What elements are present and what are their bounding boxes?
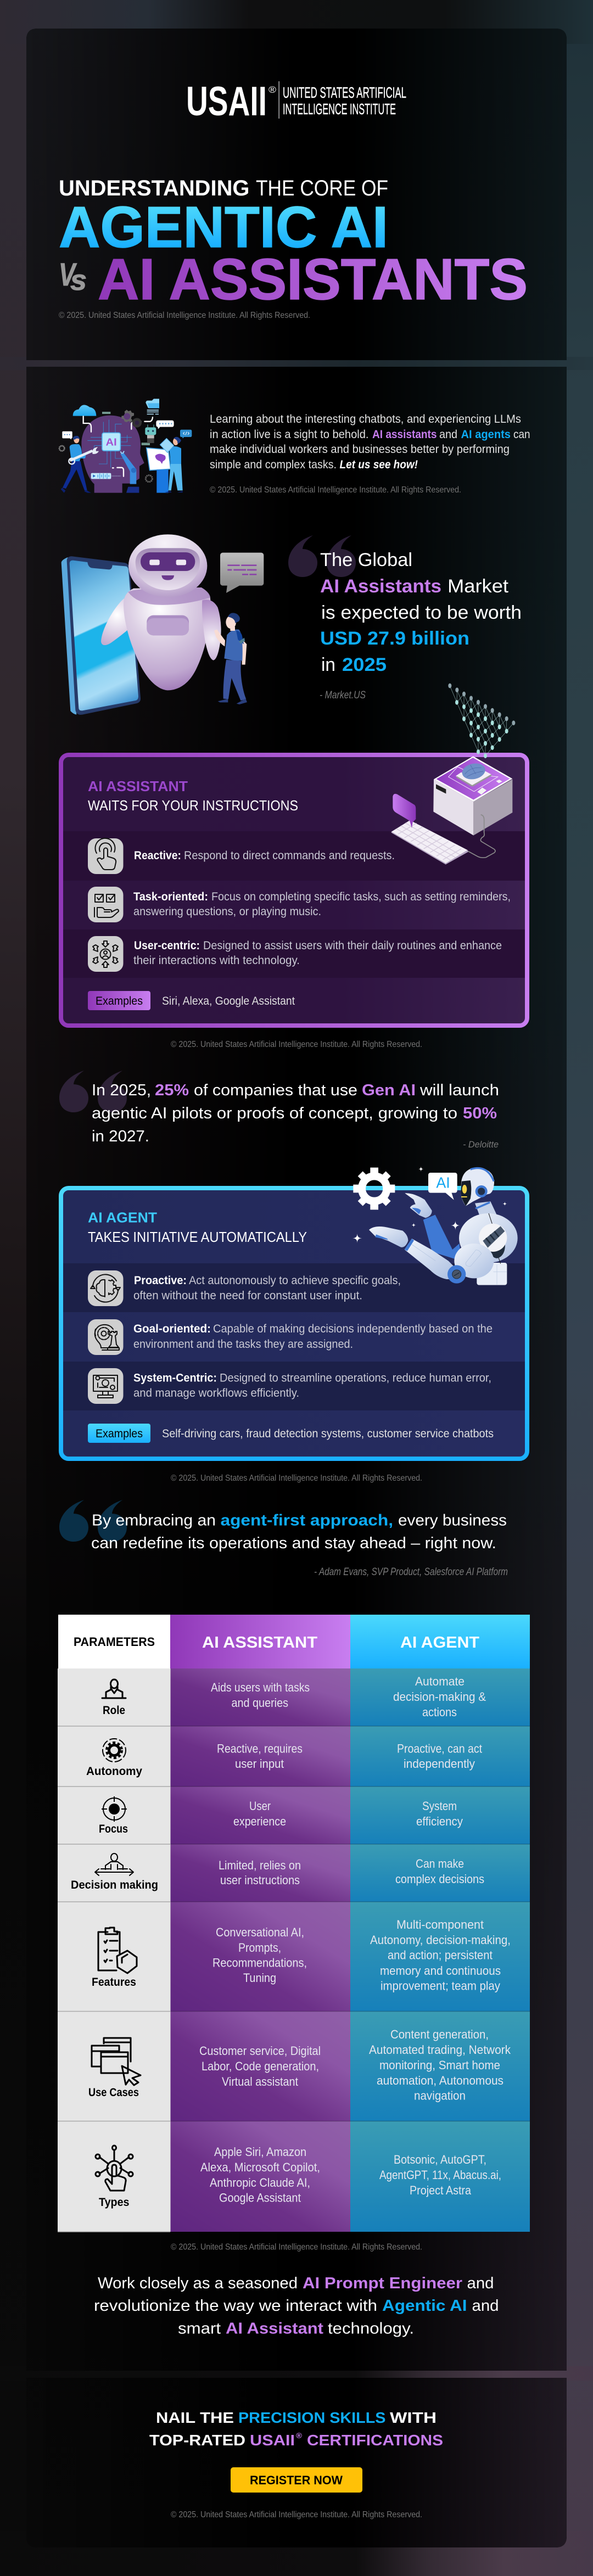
row: focus: User [249,1799,271,1813]
row: use cases: automation, Autonomous [377,2074,504,2087]
illustration: AI head and engineers [59,399,192,493]
row: role: actions [422,1705,457,1719]
icon: autonomy [103,1739,126,1762]
CTA heading: WITH [390,2409,437,2426]
row: role: Automate [415,1675,465,1688]
icon: types [96,2146,133,2191]
intro paragraph [210,412,530,471]
row: user centric: their interactions with technology. [133,954,300,967]
quote: Deloitte: in 2027. [92,1128,149,1145]
person [214,613,247,704]
CTA heading: CERTIFICATIONS [307,2432,443,2449]
quote: Deloitte: will launch [419,1082,499,1099]
heading: AI AGENT [88,1210,157,1225]
row: goal oriented: environment and the tasks they are assigned. [133,1337,353,1351]
USAII logo: UNITED STATES ARTIFICIAL [283,84,406,101]
row: decision making: Decision making [71,1879,158,1891]
quote: Deloitte: In 2025, [92,1082,151,1099]
title: UNDERSTANDING [59,176,249,200]
row: features [58,1902,530,2012]
intro paragraph: simple and complex tasks. [210,458,337,471]
row: focus [58,1787,530,1844]
row: goal oriented: Goal-oriented: [133,1322,211,1335]
row: user centric [88,936,502,972]
quote: Deloitte: agentic AI pilots or proofs of concept, growing to [92,1105,457,1122]
row: role [58,1668,530,1726]
icon: monitor workflow [88,1368,123,1404]
closing statement: revolutionize the way we interact with [94,2297,377,2315]
gear [353,1168,395,1209]
quote: Deloitte: - Deloitte [463,1139,499,1150]
intro paragraph: Let us see how! [339,458,418,471]
icon: features [98,1928,137,1973]
quote: Adam Evans: every business [398,1512,507,1530]
row: reactive: Respond to direct commands and requests. [184,849,395,862]
row: types [58,2121,530,2232]
row: autonomy: Reactive, requires [217,1741,303,1756]
row: role: Role [103,1704,125,1717]
copyright: © 2025. United States Artificial Intelligence Institute. All Rights Reserved. [171,2242,422,2252]
row: autonomy: user input [235,1757,284,1771]
row: features: Recommendations, [212,1956,307,1970]
row: decision making: Can make [416,1857,464,1871]
quote: global market: The Global [320,550,412,570]
title: V [59,257,77,293]
USAII logo: ® [268,85,277,95]
row: autonomy: independently [404,1757,475,1771]
row: features: memory and continuous [380,1964,501,1978]
title: s [70,265,87,296]
row: decision making: user instructions [220,1873,300,1887]
icon: quote marks [59,1500,127,1542]
icon: role [102,1679,126,1698]
row: system centric: and manage workflows efficiently. [133,1386,299,1399]
phone [61,556,141,715]
icon: user centred [88,936,123,972]
row: use cases: navigation [414,2088,466,2103]
table header [58,1615,530,1668]
row: autonomy [58,1726,530,1787]
quote: Adam Evans: agent-first approach, [221,1512,393,1530]
copyright: © 2025. United States Artificial Intelligence Institute. All Rights Reserved. [210,485,461,495]
row: proactive: Proactive: [134,1274,187,1287]
row: types: Project Astra [410,2183,472,2197]
quote: global market: in [321,654,335,675]
icon: quote marks [288,535,356,577]
intro paragraph: AI agents [461,428,511,441]
row: features: Conversational AI, [216,1925,304,1939]
examples: Siri, Alexa, Google Assistant [162,994,295,1007]
title: AGENTIC AI [59,195,388,260]
AI speech bubble: AI [436,1174,450,1191]
quote: Deloitte: 50% [463,1105,497,1122]
heading [88,779,298,814]
CTA heading [149,2409,443,2449]
CTA heading: PRECISION SKILLS [238,2409,385,2426]
icon: touch [88,838,123,874]
examples: Examples [96,994,143,1007]
intro paragraph: AI assistants [372,428,437,441]
icon: bulb and chess piece [88,1319,123,1355]
row: reactive [88,838,395,874]
table header: AI ASSISTANT [202,1634,318,1651]
row: role: and queries [232,1696,288,1710]
row: task oriented: answering questions, or playing music. [133,905,321,918]
register button: REGISTER NOW [250,2473,343,2487]
row: system centric: Designed to streamline operations, reduce human error, [220,1371,491,1385]
closing statement [94,2275,499,2338]
quote: global market: is expected to be worth [321,602,522,623]
icon: focus [102,1796,127,1822]
row: focus: System [422,1799,457,1813]
panel: AI assistant [61,684,527,1026]
closing statement: Work closely as a seasoned [98,2275,298,2292]
closing statement: Agentic AI [382,2297,467,2315]
illustration: AI head and engineers: AI [106,436,117,448]
copyright: © 2025. United States Artificial Intelligence Institute. All Rights Reserved. [171,1040,422,1049]
quote: Deloitte: of companies that use [194,1082,357,1099]
illustration: robot and phone [61,534,264,715]
copyright: © 2025. United States Artificial Intelligence Institute. All Rights Reserved. [59,311,310,320]
quote: global market: - Market.US [320,690,366,701]
USAII logo [186,78,406,124]
row: system centric: System-Centric: [133,1371,217,1385]
panel: main content [26,367,567,2371]
USAII logo: USAII [186,78,267,124]
row: decision making [58,1844,530,1902]
row: features: Features [92,1976,136,1989]
row: goal oriented: Capable of making decisions independently based on the [213,1322,493,1335]
CTA heading: TOP-RATED [149,2432,245,2449]
row: role: Aids users with tasks [211,1681,310,1694]
row: use cases: Customer service, Digital [199,2044,321,2058]
closing statement: smart [178,2320,221,2338]
comparison table [58,1615,530,2232]
intro paragraph: make individual workers and businesses better by performing [210,443,510,456]
heading: AI ASSISTANT [88,779,188,794]
title: AI ASSISTANTS [98,247,528,312]
heading [88,1210,307,1245]
quote: global market: AI Assistants [320,576,441,597]
icon: decision [95,1853,133,1875]
table header: AI AGENT [400,1634,480,1651]
robot [369,1168,518,1285]
quote: Deloitte: 25% [155,1082,189,1099]
quote: global market: Market [447,576,509,597]
panel: header [26,29,567,360]
row: types: Apple Siri, Amazon [214,2145,306,2159]
row: use cases: Use Cases [88,2086,139,2099]
register button [231,2467,362,2493]
row: types: Anthropic Claude AI, [210,2176,310,2189]
row: use cases [58,2012,530,2121]
intro paragraph: and [439,428,457,441]
row: use cases: Automated trading, Network [369,2043,511,2057]
quote: Adam Evans: can redefine its operations and stay ahead – right now. [91,1535,496,1552]
CTA heading: NAIL THE [156,2409,234,2426]
CTA heading: ® [296,2431,303,2440]
speech bubble [220,553,264,593]
intro paragraph: can [513,428,530,441]
quote: global market [288,535,522,701]
examples [88,991,295,1010]
row: features: Prompts, [238,1941,281,1955]
table header: PARAMETERS [74,1635,155,1649]
quote: global market: USD 27.9 billion [320,628,469,649]
row: focus: Focus [99,1823,128,1835]
examples: Examples [96,1427,143,1440]
title [59,176,528,312]
row: user centric: User-centric: [134,939,200,952]
row: reactive: Reactive: [134,849,181,862]
quote: Deloitte [59,1071,499,1150]
row: autonomy: Proactive, can act [397,1741,482,1756]
row: role: decision-making & [393,1690,486,1704]
CTA heading: USAII [250,2432,295,2449]
AI speech bubble [428,1173,457,1200]
closing statement: AI Assistant [226,2320,324,2338]
closing statement: technology. [328,2320,414,2338]
panel: call to action [145,2378,567,2547]
row: goal oriented [88,1319,493,1355]
icon: quote marks [59,1071,127,1112]
row: decision making: complex decisions [395,1872,484,1886]
row: use cases: Virtual assistant [222,2075,298,2088]
row: types: Types [99,2196,130,2209]
quote: global market: 2025 [342,654,387,675]
closing statement: AI Prompt Engineer [303,2275,462,2292]
row: task oriented [88,887,511,922]
quote: Deloitte: Gen AI [362,1082,416,1099]
row: features: Autonomy, decision-making, [370,1933,511,1947]
illustration: computer and keyboard [391,756,512,865]
heading: TAKES INITIATIVE AUTOMATICALLY [88,1229,307,1245]
closing statement: and [467,2275,494,2292]
illustration: robot with gear [353,1167,518,1285]
quote: Adam Evans: - Adam Evans, SVP Product, Salesforce AI Platform [314,1566,508,1578]
row: types: Botsonic, AutoGPT, [394,2153,486,2166]
USAII logo: INTELLIGENCE INSTITUTE [283,100,396,117]
copyright: © 2025. United States Artificial Intelligence Institute. All Rights Reserved. [171,1474,422,1483]
quote: Adam Evans: By embracing an [92,1512,216,1530]
title: THE CORE OF [256,176,388,200]
icon: use cases [92,2038,141,2085]
row: autonomy: Autonomy [86,1765,142,1778]
row: features: Multi-component [396,1918,484,1931]
row: user centric: Designed to assist users with their daily routines and enhance [203,939,502,952]
row: task oriented: Task-oriented: [133,890,208,903]
row: types: Google Assistant [219,2191,301,2205]
panel: AI agent [61,1167,527,1459]
row: proactive [88,1270,401,1306]
row: decision making: Limited, relies on [219,1858,301,1872]
icon: brain gear [88,1270,123,1306]
row: focus: efficiency [416,1815,463,1828]
row: task oriented: Focus on completing specific tasks, such as setting reminders, [211,890,511,903]
robot [101,534,221,690]
row: features: Tuning [243,1971,276,1985]
row: use cases: Content generation, [390,2028,489,2041]
row: types: AgentGPT, 11x, Abacus.ai, [379,2168,501,2182]
icon: tasks [88,887,123,922]
row: features: and action; persistent [388,1948,493,1962]
row: proactive: Act autonomously to achieve specific goals, [189,1274,401,1287]
examples [88,1424,494,1443]
neural mesh decoration [448,684,515,758]
heading: WAITS FOR YOUR INSTRUCTIONS [88,797,298,814]
row: features: improvement; team play [381,1979,500,1993]
quote: Adam Evans [59,1500,508,1578]
row: proactive: often without the need for constant user input. [133,1289,362,1302]
row: system centric [88,1368,491,1404]
row: types: Alexa, Microsoft Copilot, [200,2160,320,2174]
intro paragraph: Learning about the interesting chatbots, and experiencing LLMs [210,412,521,425]
closing statement: and [472,2297,499,2315]
row: use cases: monitoring, Smart home [379,2058,500,2072]
row: use cases: Labor, Code generation, [202,2059,319,2073]
intro paragraph: in action live is a sight to behold. [210,428,369,441]
row: focus: experience [233,1815,286,1828]
copyright: © 2025. United States Artificial Intelligence Institute. All Rights Reserved. [171,2510,422,2519]
examples: Self-driving cars, fraud detection systems, customer service chatbots [162,1427,494,1440]
